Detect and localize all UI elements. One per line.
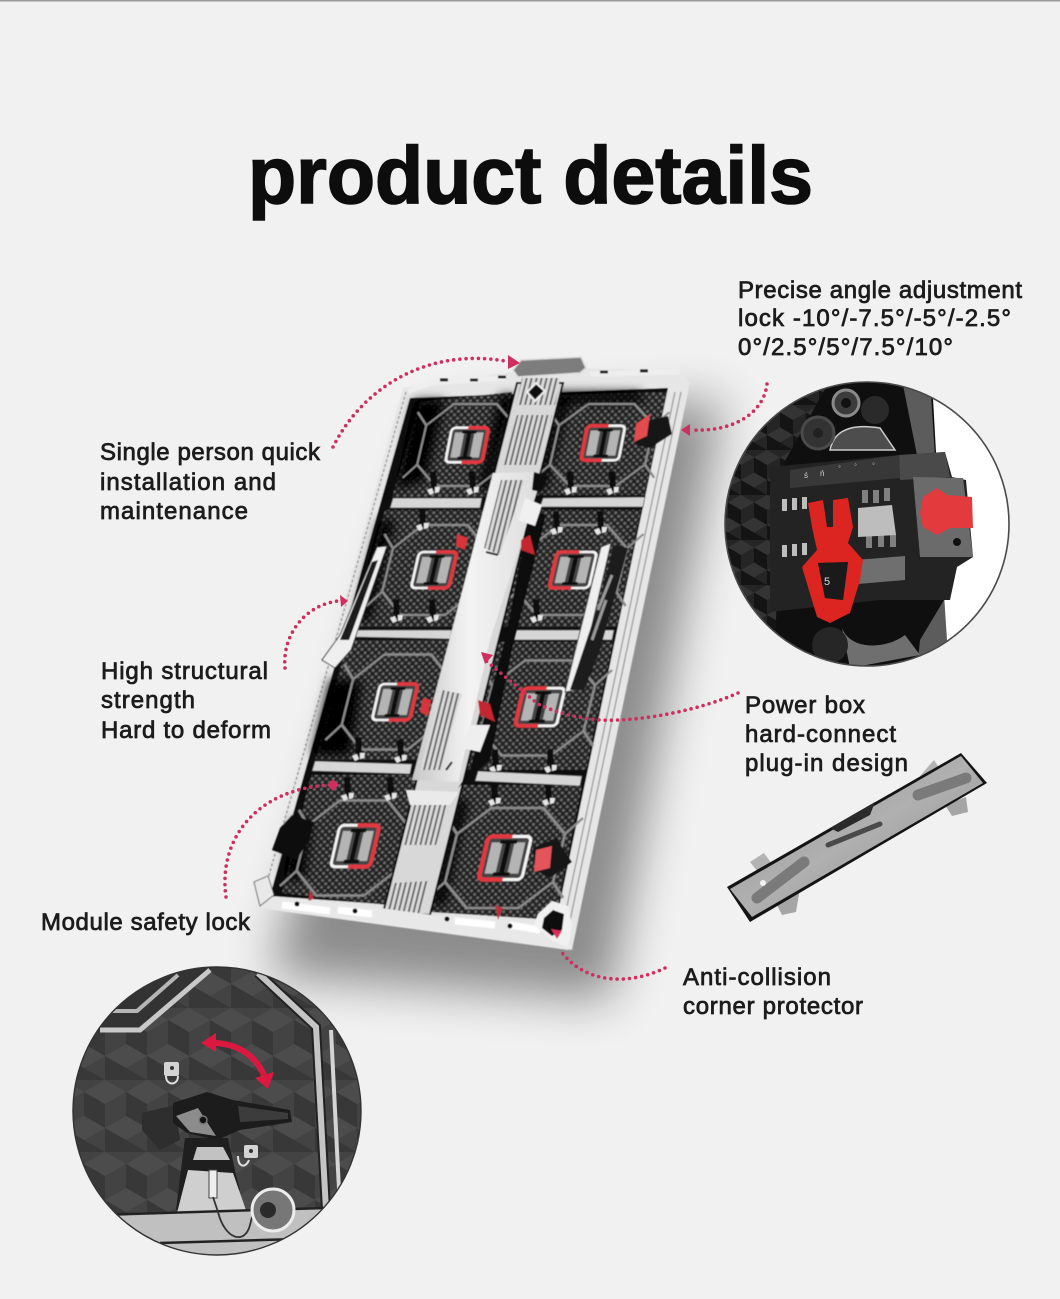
box groove left [757, 862, 804, 898]
label: angle adjustment [738, 277, 1022, 361]
panel shadow [270, 400, 722, 1000]
centre handle [412, 472, 540, 782]
upper right plate [899, 452, 950, 480]
left frame rail lines [262, 392, 406, 900]
box hole [760, 880, 766, 886]
handle upper vents [484, 480, 525, 555]
lower grey arc [842, 628, 920, 668]
spine top lock diamond [527, 383, 545, 401]
bottom frame clips [282, 905, 540, 930]
label: angle adjustment: Precise angle adjustment [738, 277, 1022, 304]
title: product details [248, 131, 813, 221]
small hook top [164, 1062, 179, 1084]
cell right 2 [503, 510, 641, 627]
module cells [282, 392, 667, 920]
lock base cap [193, 1147, 230, 1160]
upper grey arc [830, 427, 895, 450]
box top surface [730, 756, 983, 917]
spine top block [516, 378, 560, 405]
cell left 1 [392, 392, 512, 497]
label: single person: installation and [100, 469, 276, 496]
round bolt core [260, 1202, 276, 1218]
label: structural strength: strength [101, 687, 195, 714]
label: corner protector: corner protector [683, 993, 863, 1020]
handle recess [340, 560, 378, 640]
black rail right of handle [458, 510, 546, 788]
dotted arrow: angle lock [681, 384, 767, 436]
module latches [341, 471, 619, 806]
red safety handle [802, 498, 863, 623]
circuit octagons [278, 404, 671, 908]
label: power box: plug-in design [745, 750, 908, 777]
cube texture [76, 968, 359, 1213]
far right rail [331, 1030, 339, 1190]
box groove right [918, 778, 966, 795]
lock body [173, 1092, 292, 1140]
top frame bolts [440, 371, 648, 380]
detail circle: module safety lock [70, 965, 365, 1265]
lock stem dark [176, 1138, 240, 1210]
label: single person [100, 439, 321, 525]
red rotation arrow [201, 1033, 274, 1089]
bottom right corner protector [534, 901, 572, 948]
box dark notch [830, 802, 875, 832]
horizontal cross bars [312, 497, 645, 786]
right side handle [565, 543, 611, 692]
dotted arrow: corner protector [560, 950, 665, 979]
bottom frame [258, 897, 572, 950]
right rail highlight [258, 973, 326, 1210]
left side handle [322, 546, 387, 668]
label: power box: hard-connect [745, 721, 896, 748]
label: single person: Single person quick [100, 439, 321, 466]
label: corner protector: Anti-collision [683, 964, 831, 991]
frame inner black [270, 388, 668, 917]
cell right 3 [466, 642, 613, 770]
housing hole [953, 538, 961, 546]
carbon texture left [726, 389, 825, 632]
handle top black notch [532, 472, 548, 492]
centre black mechanism [770, 452, 973, 612]
handle window [818, 562, 848, 600]
right bracket strokes [592, 575, 612, 640]
cable loops [213, 1197, 253, 1237]
label: structural strength: High structural [101, 658, 268, 685]
lock base [177, 1170, 247, 1213]
handle inner black strip [446, 552, 498, 770]
carbon body [776, 382, 944, 666]
scale marks: ◦ [838, 462, 841, 471]
scale plate [790, 455, 900, 488]
top edge line [0, 0, 1060, 2]
cell left 2 [352, 510, 485, 627]
label: single person: maintenance [100, 498, 248, 525]
right frame rail lines [563, 392, 681, 935]
box groove middle [828, 824, 880, 845]
corner arrow head [551, 929, 562, 939]
small hook bottom [238, 1145, 258, 1166]
box tabs [750, 853, 772, 872]
cell left 3 [315, 640, 452, 760]
central spine [383, 383, 563, 915]
detail circle: angle lock [720, 380, 1009, 670]
bottom left corner [254, 876, 274, 906]
round bolt [252, 1189, 294, 1231]
scale marks: ń [820, 469, 824, 478]
top carry tab [513, 357, 586, 377]
label: power box [745, 692, 908, 777]
handle lower vents [420, 690, 462, 770]
base slot [209, 1170, 217, 1198]
cell left 4 [282, 775, 417, 905]
grey edge strip [904, 388, 947, 656]
box body [727, 753, 987, 922]
cell right 4 [430, 785, 582, 920]
right rail [258, 973, 326, 1210]
lock bolt [199, 1116, 207, 1124]
red lever [920, 488, 973, 535]
label: module safety lock: Module safety lock [41, 909, 251, 936]
bolts [802, 390, 889, 663]
lever housing [913, 477, 973, 557]
scale marks: ◦ [872, 459, 875, 468]
top frame clips [408, 372, 680, 392]
sliding block [858, 505, 896, 537]
lock highlight [176, 1108, 216, 1136]
gear rack [782, 488, 896, 557]
cabinet frame [258, 368, 690, 950]
spine lower block [406, 790, 459, 805]
lock shadow [142, 1105, 180, 1150]
corner protector dark core [542, 910, 564, 936]
scale marks [804, 462, 874, 478]
spine lower vents [402, 805, 448, 845]
red lock parts [308, 414, 672, 920]
spine upper vents [503, 415, 552, 465]
cell edge shading [284, 392, 645, 905]
scale marks: ◦ [854, 460, 857, 469]
left bracket black [272, 815, 314, 860]
top left second rail [112, 975, 178, 1011]
bottom bar dark line [100, 1208, 330, 1243]
red and white connectors [330, 426, 625, 880]
top left dark wedge [100, 968, 210, 1029]
label: corner protector [683, 964, 863, 1020]
spine foot vents [385, 881, 428, 922]
label: structural strength: Hard to deform [101, 717, 271, 744]
lock shaft highlight [238, 1106, 288, 1122]
dotted arrow: quick installation [333, 355, 520, 447]
bottom frame bolts [294, 902, 512, 928]
bottom bar [119, 1209, 322, 1254]
handle side white bracket [518, 498, 542, 526]
cell right 1 [536, 392, 667, 495]
dotted arrow: power box [481, 652, 738, 720]
top left light rail [100, 970, 210, 1030]
lower plate [855, 556, 905, 584]
label: power box: Power box [745, 692, 865, 719]
dotted arrow: structural strength [285, 595, 348, 668]
label: structural strength [101, 658, 271, 744]
handle lower side white bracket [462, 725, 490, 752]
right black bracket [570, 545, 628, 690]
scale marks: ś [804, 471, 808, 480]
LED panel cabinet [254, 357, 690, 950]
handle window marks: 5 [824, 576, 830, 588]
label: angle adjustment: 0°/2.5°/5°/7.5°/10° [738, 334, 953, 361]
power box illustration [727, 753, 987, 922]
dotted arrow: module safety lock [225, 779, 339, 897]
label: angle adjustment: lock -10°/-7.5°/-5°/-2.5° [738, 305, 1011, 332]
